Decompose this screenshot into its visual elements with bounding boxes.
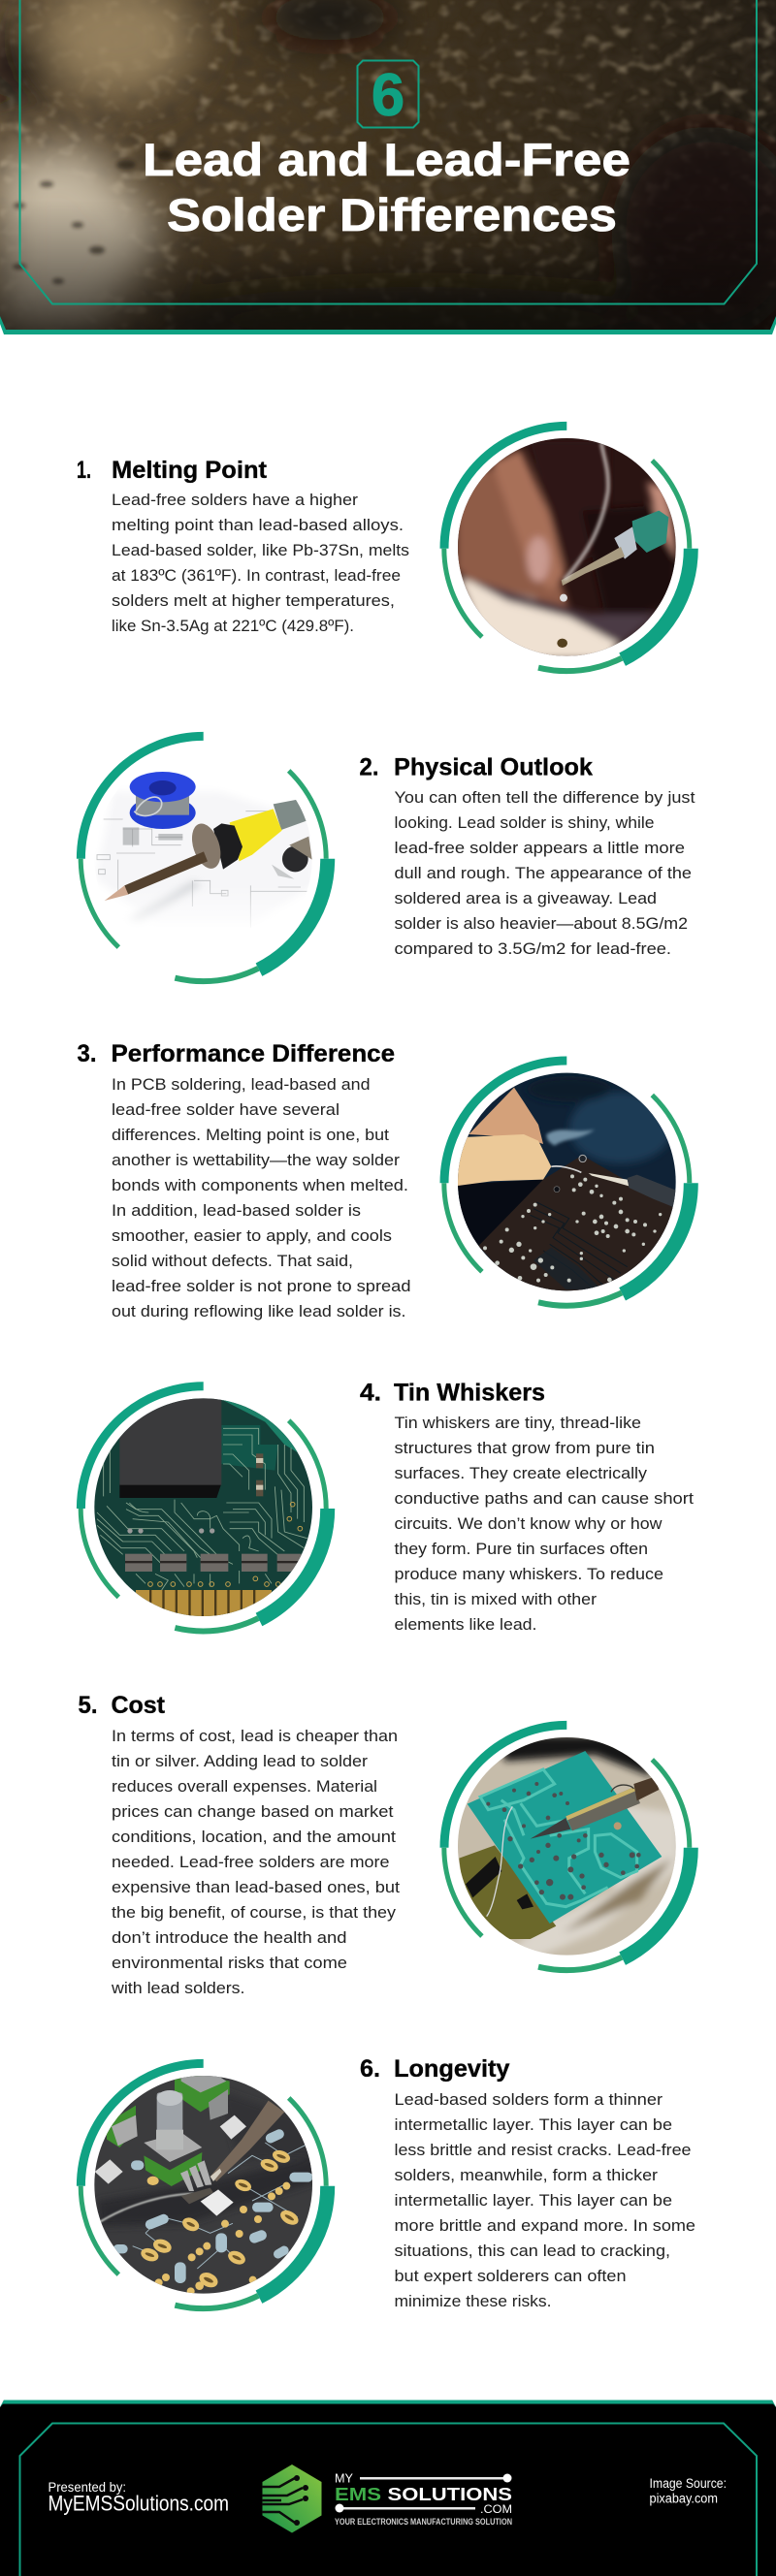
text block 2: compared to 3.5G/m2 for lead-free. (394, 939, 671, 958)
title (143, 134, 630, 240)
text block 4: produce many whiskers. To reduce (394, 1565, 663, 1583)
text block 6: minimize these risks. (394, 2292, 551, 2310)
text block 6: intermetallic layer. This layer can be (394, 2115, 672, 2134)
section 6: longevity (81, 2055, 695, 2310)
text block 6: more brittle and expand more. In some (394, 2216, 695, 2235)
text block 1: like Sn-3.5Ag at 221ºC (429.8ºF). (112, 617, 354, 635)
heading 6: Longevity (394, 2055, 510, 2083)
photo: soldering iron and solder spool (97, 772, 312, 927)
text block 5: expensive than lead-based ones, but (112, 1878, 400, 1896)
heading 5 (78, 1692, 166, 1719)
logo wordmark: MY (335, 2470, 353, 2486)
text block 3: lead-free solder is not prone to spread (112, 1277, 411, 1295)
text block 5: don’t introduce the health and (112, 1928, 347, 1947)
section 5: cost (78, 1692, 691, 1997)
text block 3: smoother, easier to apply, and cools (112, 1226, 392, 1245)
decorative ring 6 (81, 2063, 328, 2308)
heading 5: Cost (111, 1692, 166, 1719)
heading 3: 3. (78, 1040, 97, 1067)
header inner frame (19, 0, 757, 304)
text block 5: needed. Lead-free solders are more (112, 1853, 390, 1871)
text block 5: tin or silver. Adding lead to solder (112, 1752, 368, 1770)
section 4: tin whiskers (81, 1379, 694, 1634)
text block 3: lead-free solder have several (112, 1100, 340, 1119)
photo: teal circuit board being soldered (456, 1735, 679, 1958)
text block 3: bonds with components when melted. (112, 1176, 408, 1194)
text block 4: elements like lead. (394, 1615, 537, 1634)
presented by: Presented by: (48, 2479, 126, 2495)
text block 3: solid without defects. That said, (112, 1252, 353, 1270)
presented by: MyEMSSolutions.com (48, 2492, 229, 2515)
text block 1: melting point than lead-based alloys. (112, 516, 404, 534)
logo wordmark: .COM (480, 2502, 512, 2516)
footer inner frame (19, 2424, 757, 2576)
header background photo: circuit board (0, 0, 776, 353)
text block 1: at 183ºC (361ºF). In contrast, lead-free (112, 566, 401, 585)
photo: hand soldering dark circuit board (456, 1069, 679, 1296)
text block 6: solders, meanwhile, form a thicker (394, 2166, 658, 2184)
header teal base band (0, 316, 776, 334)
heading 2: Physical Outlook (394, 754, 593, 781)
photo: solder droplet (456, 436, 679, 659)
text block 6: but expert solderers can often (394, 2267, 627, 2285)
panel: footer (0, 2401, 776, 2576)
text block 5: with lead solders. (111, 1979, 244, 1997)
text block 3: In addition, lead-based solder is (112, 1201, 361, 1220)
heading 5: 5. (78, 1692, 97, 1719)
section 1: melting point (77, 426, 691, 671)
logo hexagon icon (262, 2465, 322, 2532)
section 3: performance difference (78, 1040, 691, 1320)
heading 6: 6. (360, 2055, 380, 2083)
text block 5: In terms of cost, lead is cheaper than (112, 1727, 398, 1745)
image source (650, 2476, 727, 2505)
presented by (48, 2479, 229, 2515)
text block 6: Lead-based solders form a thinner (394, 2090, 663, 2109)
photo: soldering a rotary encoder on a dark board (90, 2072, 317, 2298)
text block 1 (112, 491, 409, 635)
decorative ring 1 (444, 426, 691, 671)
decorative ring 4 (81, 1386, 328, 1631)
text block 2: solder is also heavier—about 8.5G/m2 (394, 914, 688, 933)
text block 5: prices can change based on market (112, 1802, 394, 1821)
text block 4: structures that grow from pure tin (394, 1439, 655, 1457)
text block 5: conditions, location, and the amount (112, 1828, 396, 1846)
footer background (0, 2401, 776, 2576)
text block 3 (112, 1075, 411, 1320)
text block 1: Lead-free solders have a higher (112, 491, 358, 509)
text block 1: Lead-based solder, like Pb-37Sn, melts (112, 541, 409, 559)
text block 2: soldered area is a giveaway. Lead (394, 889, 657, 907)
text block 6 (394, 2090, 695, 2310)
text block 3: out during reflowing like lead solder is. (112, 1302, 405, 1320)
number badge: 6 (372, 62, 404, 129)
text block 3: differences. Melting point is one, but (112, 1126, 389, 1144)
text block 6: situations, this can lead to cracking, (394, 2242, 670, 2260)
photo: green circuit board with chip (90, 1396, 317, 1622)
heading 2: 2. (359, 754, 378, 781)
decorative ring 5 (444, 1725, 691, 1970)
text block 4: they form. Pure tin surfaces often (394, 1540, 648, 1558)
logo wordmark: YOUR ELECTRONICS MANUFACTURING SOLUTION (335, 2517, 512, 2527)
heading 4: 4. (360, 1379, 381, 1406)
logo wordmark: SOLUTIONS (388, 2485, 512, 2504)
heading 1: 1. (77, 457, 91, 484)
text block 1: solders melt at higher temperatures, (112, 591, 395, 610)
image source: Image Source: (650, 2476, 727, 2491)
text block 4: circuits. We don’t know why or how (394, 1514, 663, 1533)
text block 5: reduces overall expenses. Material (112, 1777, 377, 1796)
heading 3: Performance Difference (111, 1040, 395, 1067)
text block 2: dull and rough. The appearance of the (394, 864, 692, 882)
logo (262, 2465, 512, 2532)
title: Solder Differences (167, 189, 617, 240)
text block 5 (111, 1727, 400, 1997)
text block 6: intermetallic layer. This layer can be (394, 2191, 672, 2210)
text block 4 (394, 1414, 694, 1634)
text block 4: conductive paths and can cause short (394, 1489, 694, 1508)
text block 6: less brittle and resist cracks. Lead-free (394, 2141, 691, 2159)
number badge (357, 60, 419, 129)
logo wordmark: EMS (335, 2485, 381, 2504)
text block 2: You can often tell the difference by just (394, 788, 695, 807)
text block 4: surfaces. They create electrically (394, 1464, 648, 1482)
text block 3: In PCB soldering, lead-based and (112, 1075, 371, 1094)
text block 4: this, tin is mixed with other (394, 1590, 597, 1608)
text block 3: another is wettability—the way solder (112, 1151, 400, 1169)
image source: pixabay.com (650, 2492, 718, 2505)
decorative ring 2 (81, 736, 328, 981)
footer teal band (0, 2401, 776, 2407)
decorative ring 3 (444, 1061, 691, 1306)
text block 2: looking. Lead solder is shiny, while (394, 813, 654, 832)
text block 2 (394, 788, 695, 958)
logo wordmark (335, 2470, 512, 2527)
text block 5: environmental risks that come (112, 1954, 347, 1972)
text block 4: Tin whiskers are tiny, thread-like (394, 1414, 641, 1432)
section 2: physical outlook (81, 736, 695, 981)
heading 1: Melting Point (112, 457, 268, 484)
title: Lead and Lead-Free (143, 134, 630, 185)
heading 4: Tin Whiskers (394, 1379, 545, 1406)
text block 5: the big benefit, of course, is that they (112, 1903, 397, 1922)
panel: header (0, 0, 776, 353)
text block 2: lead-free solder appears a little more (394, 839, 685, 857)
